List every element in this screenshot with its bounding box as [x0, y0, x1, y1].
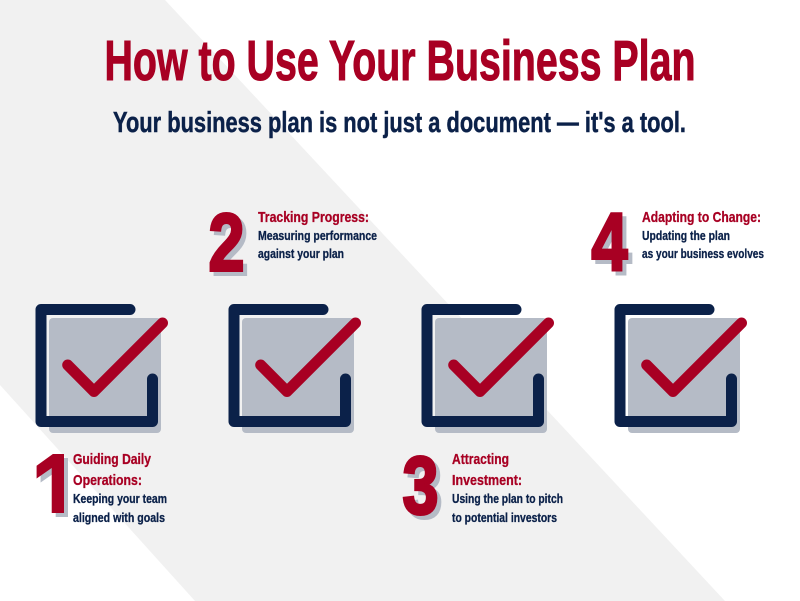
- step 1: text: Guiding Daily: [73, 451, 152, 468]
- step 4: number: 4: [596, 201, 632, 292]
- step 4: text: Updating the plan: [642, 228, 730, 243]
- step 1: number: 1: [31, 433, 82, 547]
- step 2: number: 2: [208, 198, 244, 288]
- step 2: text: Measuring performance: [258, 228, 377, 243]
- step 3: checkbox icon: [427, 310, 548, 433]
- step 3: number: 3: [406, 444, 442, 536]
- step 1: text: [73, 451, 167, 525]
- step 1: number: 1: [35, 437, 86, 551]
- step 2: text: Tracking Progress:: [258, 209, 369, 226]
- step 2: text: [258, 209, 377, 261]
- step 1: text: Keeping your team: [73, 491, 167, 506]
- step 4: checkbox icon: [620, 310, 742, 433]
- step 4: text: Adapting to Change:: [642, 209, 761, 226]
- step 3: text: Attracting: [452, 451, 509, 468]
- step 1: text: Operations:: [73, 472, 142, 489]
- step 2: number: 2: [212, 202, 248, 292]
- step 4: text: [642, 209, 764, 261]
- step 1: checkbox icon: [41, 310, 162, 433]
- step 3: number: 3: [402, 440, 438, 532]
- step 3: text: to potential investors: [452, 510, 557, 525]
- step 4: text: as your business evolves: [642, 246, 764, 261]
- step 1: text: aligned with goals: [73, 510, 165, 525]
- step 3: text: Investment:: [452, 472, 522, 489]
- step 3: text: Using the plan to pitch: [452, 491, 563, 506]
- step 2: checkbox icon: [234, 310, 356, 433]
- step 2: text: against your plan: [258, 246, 344, 261]
- step 1: number: [36, 454, 68, 517]
- step 4: number: 4: [592, 197, 628, 288]
- step 3: text: [452, 451, 563, 525]
